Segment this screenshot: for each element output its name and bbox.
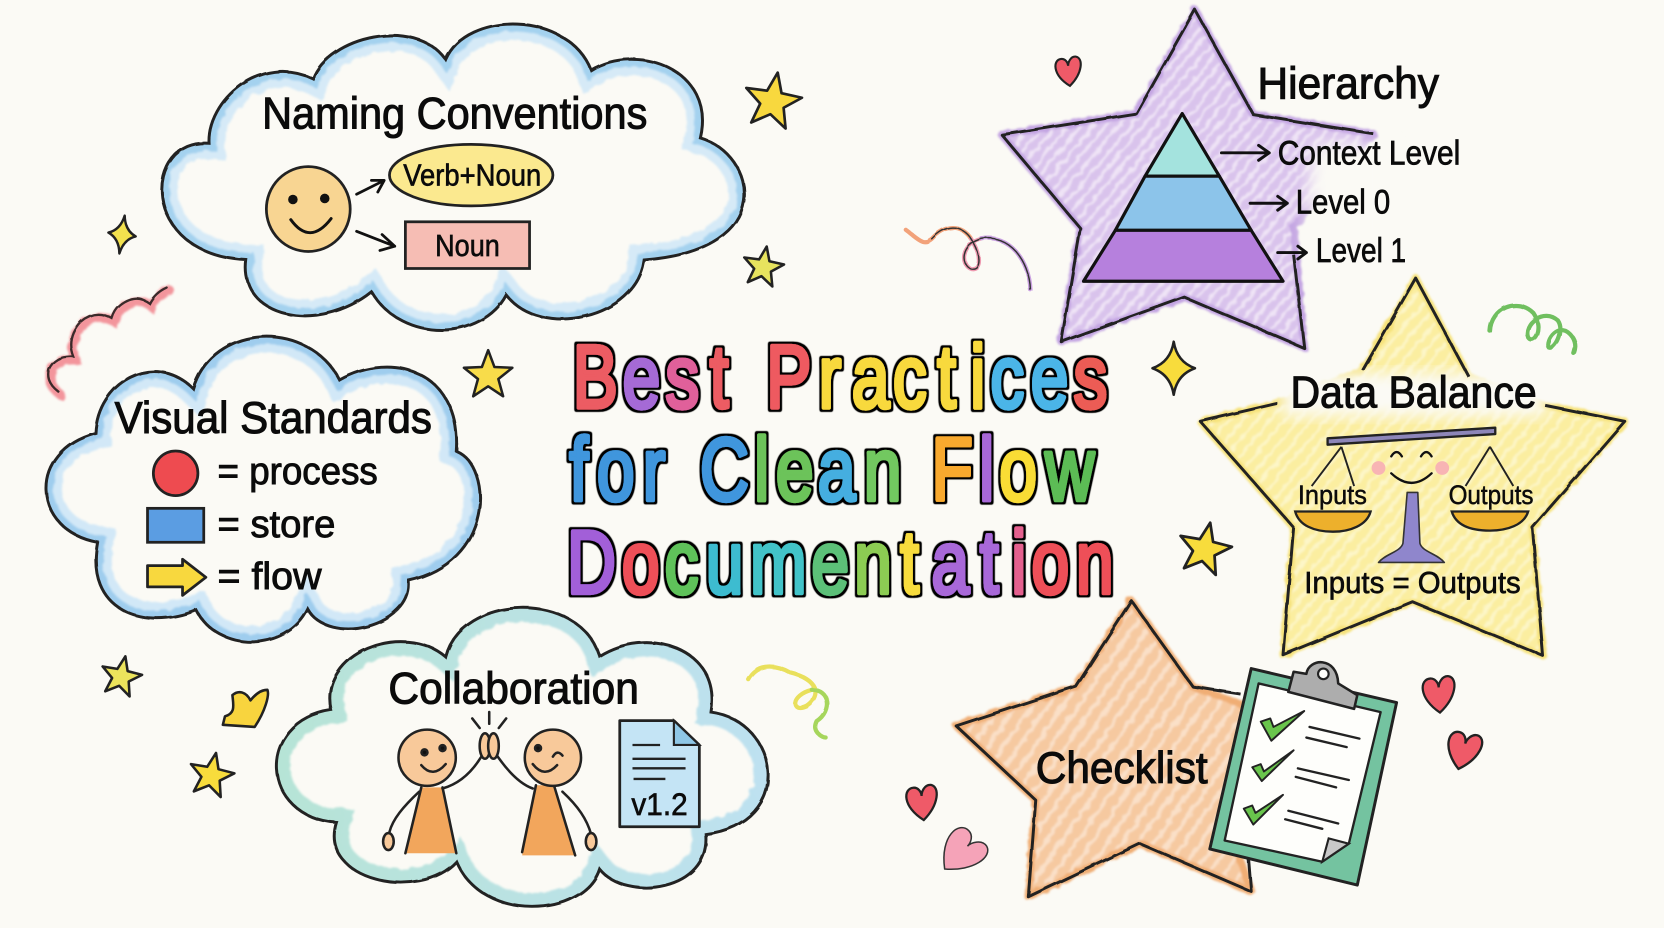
panel: checklist star	[956, 601, 1397, 897]
icon: yellow star by visual standards	[464, 350, 512, 396]
icon: sparkle centre	[1152, 342, 1195, 395]
icon: small star lower left	[98, 652, 145, 698]
arrow: to verb plus noun	[357, 180, 384, 194]
label: verb plus noun ellipse: Verb+Noun	[403, 158, 541, 193]
heading: collaboration: Collaboration	[388, 665, 639, 714]
text: equals flow: = flow	[218, 555, 322, 598]
arrow: level 1	[1278, 246, 1306, 259]
text: equals process: = process	[218, 450, 378, 493]
icon: red process circle	[153, 451, 198, 496]
label: verb plus noun ellipse	[389, 144, 553, 206]
arrow: context level	[1221, 145, 1269, 160]
decoration: green squiggle	[1490, 305, 1575, 353]
icon: yellow heart shape	[223, 690, 268, 727]
decoration: orange purple squiggle	[906, 228, 1030, 290]
label: outputs: Outputs	[1449, 480, 1533, 510]
arrow: to noun	[357, 231, 395, 250]
label: context level: Context Level	[1278, 134, 1460, 172]
icon: yellow flow arrow	[148, 559, 206, 595]
title: best practices for clean flow documentation	[567, 326, 1114, 612]
title: best practices for clean flow documentation: Documentation	[567, 512, 1114, 612]
label: noun box	[405, 222, 530, 268]
text: inputs equals outputs: Inputs = Outputs	[1304, 565, 1521, 600]
icon: check marks	[1244, 711, 1304, 825]
icon: pink heart	[930, 822, 992, 883]
label: level 0: Level 0	[1296, 183, 1390, 221]
icon: smiley face	[266, 167, 350, 252]
panel: hierarchy star	[1002, 10, 1460, 348]
arrow: level 0	[1250, 196, 1287, 210]
label: noun box: Noun	[435, 228, 500, 263]
heading: naming conventions: Naming Conventions	[262, 89, 647, 138]
label: level 1: Level 1	[1316, 232, 1406, 270]
heading: visual standards: Visual Standards	[115, 394, 432, 443]
label: inputs: Inputs	[1298, 480, 1367, 510]
icon: document v1.2	[620, 721, 699, 827]
decoration: yellow green squiggle	[748, 666, 827, 738]
icon: slim star	[740, 243, 787, 288]
icon: scale smiling face	[1372, 452, 1449, 483]
icon: heart right lower	[1442, 729, 1484, 773]
panel: visual standards cloud	[46, 337, 480, 642]
icon: heart right upper	[1422, 676, 1456, 713]
decoration: red scallop squiggle	[48, 288, 169, 395]
heading: data balance: Data Balance	[1290, 369, 1537, 418]
chart: pyramid	[1084, 114, 1283, 281]
icon: large yellow star top	[741, 68, 806, 130]
text: equals store: = store	[218, 503, 335, 546]
icon: small star bottom left	[186, 748, 238, 799]
title: best practices for clean flow documentation: Best Practices	[573, 326, 1107, 427]
heading: checklist: Checklist	[1036, 744, 1208, 793]
icon: yellow star right of title	[1174, 517, 1236, 577]
text lines on checklist	[1285, 727, 1359, 829]
title: best practices for clean flow documentation: for Clean Flow	[569, 419, 1095, 519]
heading: hierarchy: Hierarchy	[1258, 60, 1440, 109]
icon: blue store rectangle	[148, 508, 204, 542]
icon: clipboard	[1210, 662, 1397, 885]
icon: heart lower left	[905, 784, 939, 821]
icon: balance scale	[1295, 428, 1528, 562]
panel: collaboration cloud	[276, 608, 768, 907]
panel: data balance star	[1200, 278, 1625, 656]
icon: heart top	[1055, 56, 1083, 87]
icon: document v1.2: v1.2	[631, 786, 688, 822]
icon: sparkle left	[106, 214, 138, 255]
panel: naming conventions cloud	[162, 24, 744, 330]
icon: high-five people	[383, 712, 596, 855]
